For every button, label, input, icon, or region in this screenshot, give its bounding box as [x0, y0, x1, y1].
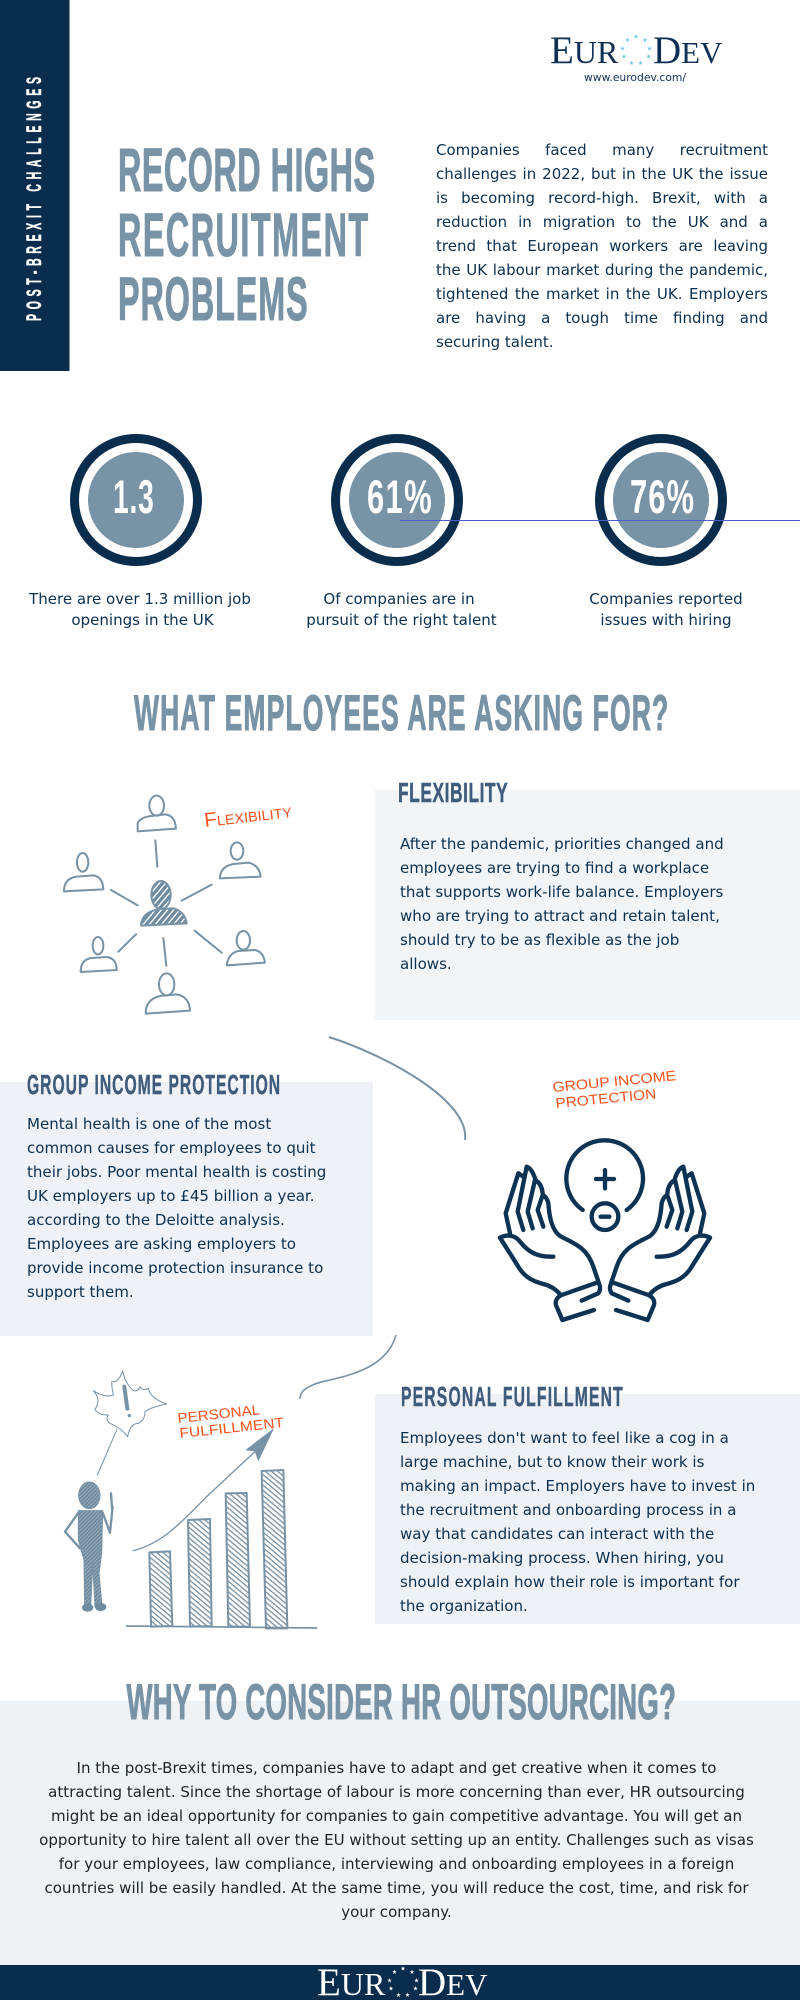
curved connector 1: [329, 1037, 465, 1140]
personal fulfillment text: the organization.: [400, 1597, 528, 1615]
group income protection text: [27, 1115, 326, 1301]
stat circle: 1.3: [74, 438, 198, 562]
intro paragraph: is becoming record-high. Brexit, with a: [436, 189, 768, 207]
flexibility text: employees are trying to find a workplace: [400, 859, 709, 877]
curved connector 2: [300, 1335, 396, 1399]
intro paragraph: reduction in migration to the UK and a: [436, 213, 768, 231]
logo website url: www.eurodev.com/: [584, 71, 686, 84]
why HR outsourcing text: [39, 1759, 754, 1921]
stat caption: hiring issues: issues with hiring: [600, 611, 732, 629]
personal fulfillment text: Employees don't want to feel like a cog in a: [400, 1429, 729, 1447]
group income protection text: Employees are asking employers to: [27, 1235, 296, 1253]
stat circle: 61%: [336, 438, 458, 562]
stat caption: hiring issues: Companies reported: [589, 590, 743, 608]
intro paragraph: tightened the market in the UK. Employers: [436, 285, 768, 303]
stat caption: hiring issues: [589, 590, 743, 629]
speech burst: [93, 1371, 167, 1437]
logo: EuroDev top: DEV: [653, 29, 723, 72]
stat caption: job openings: There are over 1.3 million job: [28, 590, 251, 608]
group income protection text: according to the Deloitte analysis.: [27, 1211, 285, 1229]
personal fulfillment text: [400, 1429, 755, 1615]
flexibility heading: FLEXIBILITY: [398, 777, 508, 808]
personal fulfillment text: making an impact. Employers have to invest in: [400, 1477, 755, 1495]
why HR outsourcing text: for your employees, law compliance, interviewing and onboarding employees in a foreign: [59, 1855, 734, 1873]
personal fulfillment text: decision-making process. When hiring, you: [400, 1549, 724, 1567]
panel: group income protection: [0, 1068, 373, 1336]
panel: why HR outsourcing: [0, 1673, 800, 1965]
panel: flexibility: [375, 777, 800, 1020]
handwritten label: group income protection: [552, 1067, 677, 1111]
intro paragraph: the UK labour market during the pandemic,: [436, 261, 768, 279]
stat caption: job openings: [28, 590, 251, 629]
logo: EuroDev top: [550, 29, 723, 84]
stat circle: 76%: 76%: [630, 472, 694, 524]
illustration: person and rising bar chart sketch: [65, 1371, 317, 1628]
intro paragraph: Companies faced many recruitment: [436, 141, 768, 159]
intro paragraph: trend that European workers are leaving: [436, 237, 768, 255]
why HR outsourcing text: your company.: [341, 1903, 452, 1921]
main title: [118, 137, 375, 334]
handwritten label: group income protection: GROUP INCOME: [552, 1067, 677, 1095]
logo: EuroDev top: EUR: [550, 29, 619, 72]
stat circle: 1.3: 1.3: [113, 472, 154, 524]
group income protection text: their jobs. Poor mental health is costing: [27, 1163, 326, 1181]
intro paragraph: challenges in 2022, but in the UK the issue: [436, 165, 768, 183]
flexibility text: After the pandemic, priorities changed and: [400, 835, 724, 853]
handwritten label: flexibility: FLEXIBILITY: [203, 800, 294, 832]
bars: [149, 1470, 287, 1628]
heading: what employees are asking for: WHAT EMPLOYEES ARE ASKING FOR?: [134, 686, 668, 741]
flexibility text: should try to be as flexible as the job: [400, 931, 679, 949]
stat circle: 76%: [600, 438, 722, 562]
personal fulfillment text: should explain how their role is important for: [400, 1573, 740, 1591]
why HR outsourcing text: countries will be easily handled. At the same time, you will reduce the cost, time, and risk for: [44, 1879, 749, 1897]
handwritten label: group income protection: PROTECTION: [555, 1085, 657, 1111]
why HR outsourcing text: In the post-Brexit times, companies have to adapt and get creative when it comes to: [77, 1759, 716, 1777]
intro paragraph: [436, 141, 768, 351]
intro paragraph: securing talent.: [436, 333, 554, 351]
main title: PROBLEMS: [118, 266, 308, 334]
why HR outsourcing text: opportunity to hire talent all over the EU without setting up an entity. Challenges such as visas: [39, 1831, 754, 1849]
personal fulfillment text: the recruitment and onboarding process in a: [400, 1501, 736, 1519]
footer bar with logo: [0, 1961, 800, 2000]
group income protection text: common causes for employees to quit: [27, 1139, 316, 1157]
why HR outsourcing text: might be an ideal opportunity for companies to gain competitive advantage. You will get an: [51, 1807, 742, 1825]
flexibility text: who are trying to attract and retain talent,: [400, 907, 720, 925]
figure: [79, 1482, 100, 1509]
stat circle: 61%: 61%: [367, 472, 432, 524]
group income protection text: Mental health is one of the most: [27, 1115, 271, 1133]
personal fulfillment text: large machine, but to know their work is: [400, 1453, 705, 1471]
rising arrow: [133, 1450, 257, 1551]
group income protection heading: GROUP INCOME PROTECTION: [27, 1068, 280, 1100]
personal fulfillment heading: PERSONAL FULFILLMENT: [401, 1380, 623, 1412]
illustration: people network sketch: [64, 796, 265, 1014]
icon: hands holding plus and minus: [500, 1140, 710, 1320]
why HR outsourcing text: attracting talent. Since the shortage of labour is more concerning than ever, HR outsourcing: [48, 1783, 745, 1801]
sidebar banner: [0, 0, 70, 371]
why HR outsourcing heading: WHY TO CONSIDER HR OUTSOURCING?: [126, 1673, 676, 1730]
handwritten label: personal fulfillment: [177, 1401, 285, 1441]
stat caption: pursuit of talent: [306, 590, 497, 629]
sidebar vertical label: POST-BREXIT CHALLENGES: [22, 77, 46, 321]
intro paragraph: are having a tough time finding and: [436, 309, 768, 327]
stat caption: pursuit of talent: Of companies are in: [323, 590, 475, 608]
group income protection text: UK employers up to £45 billion a year.: [27, 1187, 315, 1205]
flexibility text: allows.: [400, 955, 452, 973]
flexibility text: [400, 835, 724, 973]
main title: RECORD HIGHS: [118, 137, 375, 205]
handwritten label: personal fulfillment: PERSONAL: [177, 1401, 261, 1426]
panel: personal fulfillment: [375, 1380, 800, 1624]
stat caption: pursuit of talent: pursuit of the right talent: [306, 611, 497, 629]
group income protection text: support them.: [27, 1283, 134, 1301]
personal fulfillment text: way that candidates can interact with the: [400, 1525, 714, 1543]
main title: RECRUITMENT: [118, 202, 368, 270]
stat caption: job openings: openings in the UK: [71, 611, 215, 629]
handwritten label: personal fulfillment: FULFILLMENT: [179, 1414, 285, 1441]
flexibility text: that supports work-life balance. Employers: [400, 883, 724, 901]
group income protection text: provide income protection insurance to: [27, 1259, 323, 1277]
